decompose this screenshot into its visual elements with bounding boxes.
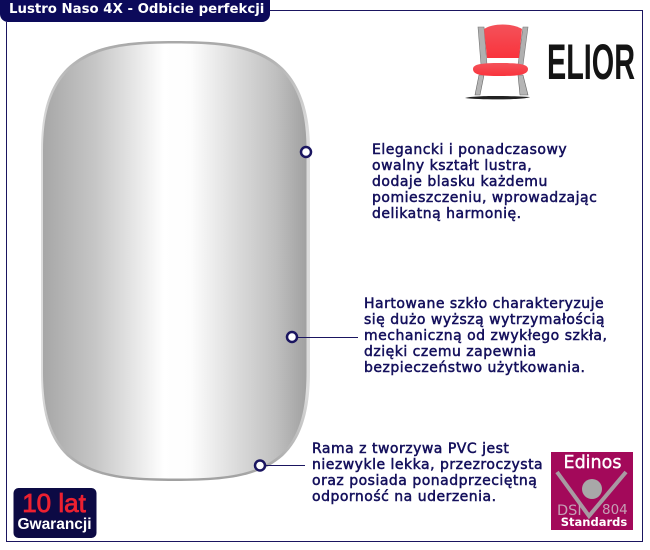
text block: rama: oraz posiada ponadprzeciętną — [312, 473, 537, 489]
text block: kształt: pomieszczeniu, wprowadzając — [372, 190, 597, 206]
standards badge: Edinos — [564, 453, 621, 473]
text block: szkło: Hartowane szkło charakteryzuje — [364, 296, 604, 312]
title — [0, 0, 270, 22]
title: Lustro Naso 4X - Odbicie perfekcji — [9, 2, 264, 17]
text block: szkło — [364, 296, 607, 376]
warranty badge: 10 lat — [22, 488, 87, 518]
callout marker: kształt — [301, 147, 311, 157]
standards badge: DSI — [557, 503, 582, 519]
text block: szkło: dzięki czemu zapewnia — [364, 344, 537, 360]
callout line: szkło — [287, 332, 358, 342]
standards badge: Standards — [561, 515, 627, 529]
text block: kształt: owalny kształt lustra, — [372, 158, 532, 174]
text block: rama: odporność na uderzenia. — [312, 489, 497, 505]
standards badge — [551, 452, 633, 530]
standards badge: 804 — [602, 502, 628, 518]
text block: kształt: delikatną harmonię. — [372, 206, 522, 222]
text block: kształt: dodaje blasku każdemu — [372, 174, 548, 190]
text block: kształt: Elegancki i ponadczasowy — [372, 142, 567, 158]
warranty badge — [14, 488, 96, 538]
text block: szkło: bezpieczeństwo użytkowania. — [364, 360, 586, 376]
icon: chair — [465, 24, 530, 99]
text block: kształt — [372, 142, 597, 222]
mirror — [41, 41, 310, 481]
callout line: rama — [255, 460, 305, 470]
text block: szkło: się dużo wyższą wytrzymałością — [364, 312, 605, 328]
text block: rama: Rama z tworzywa PVC jest — [312, 441, 509, 457]
warranty badge: Gwarancji — [17, 516, 92, 533]
text block: rama — [312, 441, 543, 505]
text block: rama: niezwykle lekka, przezroczysta — [312, 457, 543, 473]
text block: szkło: mechaniczną od zwykłego szkła, — [364, 328, 607, 344]
